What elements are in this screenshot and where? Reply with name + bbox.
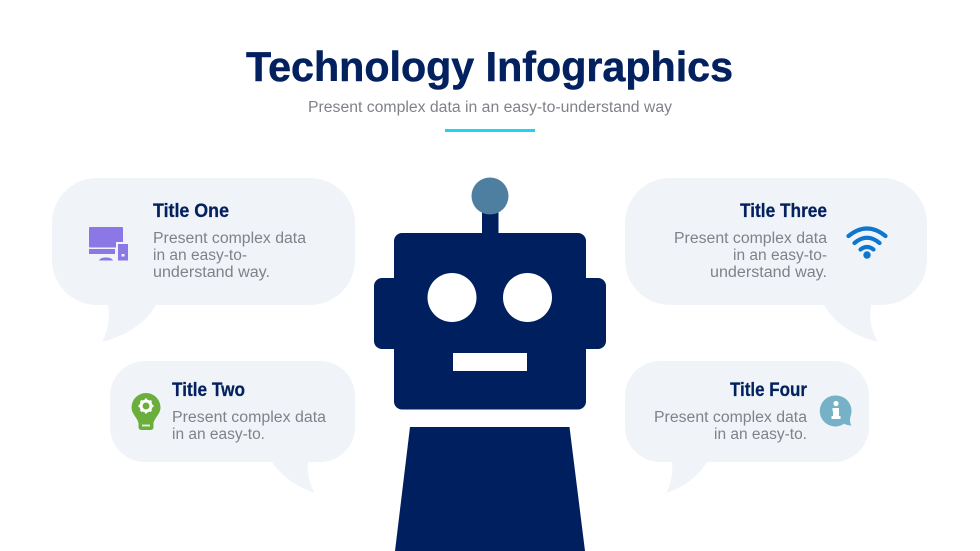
body text: Present complex data	[654, 409, 807, 426]
heading: Title Two	[172, 380, 245, 401]
antenna stem	[482, 205, 498, 235]
speech bubble	[625, 178, 927, 342]
heading: Title Three	[740, 201, 827, 222]
subtitle: Present complex data in an easy-to-understand way	[308, 99, 672, 116]
icon: wifi	[848, 228, 886, 259]
body text: Present complex data	[172, 409, 326, 426]
mouth	[453, 353, 527, 371]
body text: understand way.	[710, 264, 827, 281]
panel: title two	[110, 361, 355, 493]
heading: Title Four	[730, 380, 808, 401]
body text: in an easy-to-	[153, 247, 247, 264]
icon: light bulb with gear	[132, 393, 160, 430]
panel: title four	[625, 361, 869, 493]
antenna ball	[472, 178, 508, 214]
body text: understand way.	[153, 264, 270, 281]
body text: Present complex data	[674, 230, 827, 247]
speech bubble	[52, 178, 355, 342]
body text	[153, 230, 306, 281]
ears	[374, 278, 606, 349]
icon: info bubble	[820, 395, 852, 426]
body text: Present complex data	[153, 230, 306, 247]
head	[394, 233, 586, 410]
title: Technology Infographics	[246, 43, 733, 90]
heading: Title One	[153, 201, 229, 222]
body text	[674, 230, 827, 281]
speech bubble	[625, 361, 869, 493]
body text	[654, 409, 807, 443]
body text: in an easy-to.	[172, 426, 265, 443]
left eye	[428, 273, 476, 322]
speech bubble	[110, 361, 355, 493]
body text	[172, 409, 326, 443]
accent underline	[445, 129, 535, 132]
body	[395, 427, 585, 551]
panel: title one	[52, 178, 355, 342]
panel: title three	[625, 178, 927, 342]
body text: in an easy-to.	[714, 426, 807, 443]
body text: in an easy-to-	[733, 247, 827, 264]
right eye	[503, 273, 552, 322]
robot illustration	[374, 178, 606, 551]
icon: monitor and device	[89, 227, 130, 262]
